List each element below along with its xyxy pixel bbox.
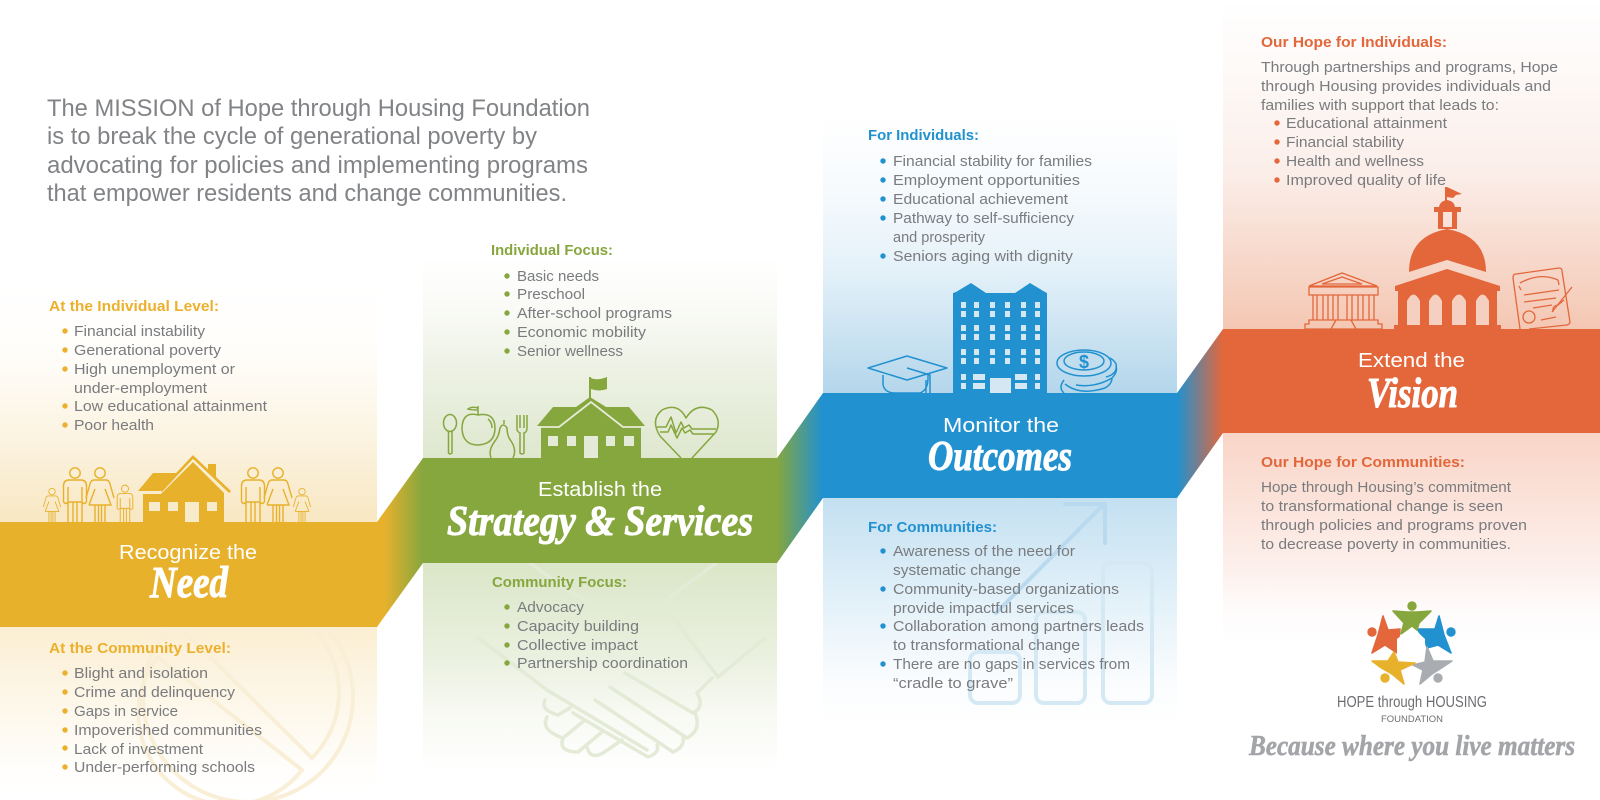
list: individual focus: After-school programs — [517, 305, 672, 322]
list: community level: Under-performing schools — [74, 759, 255, 776]
list: individual level: Financial instability — [74, 323, 205, 340]
text block: our hope for individuals: families with support that leads to: — [1261, 97, 1499, 114]
heading: recognize the need — [119, 542, 257, 607]
text block: our hope for individuals — [1261, 34, 1558, 189]
mission statement: advocating for policies and implementing programs — [47, 152, 588, 179]
heading: establish the strategy and services: Strategy & Services — [447, 499, 753, 545]
heading: monitor the outcomes: Outcomes — [928, 434, 1072, 480]
text block: our hope for communities: to transformational change is seen — [1261, 498, 1503, 515]
band: blue — [823, 393, 1177, 498]
band: yellow — [0, 522, 377, 627]
mission statement: The MISSION of Hope through Housing Foundation — [47, 95, 590, 122]
band: orange — [1223, 329, 1600, 433]
list: individual focus: Preschool — [517, 286, 585, 303]
mission statement — [47, 95, 590, 207]
arrow: yellow to green connector — [377, 458, 423, 627]
list: for communities: There are no gaps in services from — [893, 656, 1130, 673]
icon: coin stack: $ — [1079, 352, 1089, 372]
list: for individuals: For Individuals: — [868, 127, 979, 144]
list: individual focus: Basic needs — [517, 268, 599, 285]
icon: family and house — [43, 457, 311, 522]
icon: signed certificate — [1513, 268, 1572, 329]
list: community focus — [492, 574, 688, 672]
panel: establish the strategy and services — [423, 242, 777, 793]
logo: hope through housing foundation: FOUNDATION — [1381, 714, 1443, 725]
icon: school with flag — [537, 377, 645, 458]
list: for individuals: Financial stability for families — [893, 153, 1092, 170]
logo: hope through housing foundation: HOPE through HOUSING — [1337, 694, 1487, 711]
list: for individuals: Pathway to self-sufficiency — [893, 210, 1074, 227]
list: for communities: Collaboration among partners leads — [893, 618, 1144, 635]
list: individual focus: Economic mobility — [517, 324, 646, 341]
logo: hope through housing foundation — [1337, 601, 1487, 725]
heading: recognize the need: Recognize the — [119, 542, 257, 564]
list: individual level: Low educational attainment — [74, 398, 268, 415]
arrow: green to blue connector — [777, 393, 823, 563]
text block: our hope for individuals: through Housing provides individuals and — [1261, 78, 1551, 95]
list: for communities: “cradle to grave” — [893, 675, 1013, 692]
heading: establish the strategy and services — [447, 479, 753, 545]
text block: our hope for individuals: Our Hope for Individuals: — [1261, 34, 1447, 51]
watermark: prohibition symbol — [138, 592, 353, 800]
icon: coin stack — [1057, 350, 1116, 393]
text block: our hope for individuals: Educational attainment — [1286, 115, 1448, 132]
heading: extend the vision — [1358, 350, 1465, 417]
text block: our hope for individuals: Financial stability — [1286, 134, 1404, 151]
watermark: growth chart — [970, 504, 1152, 703]
heading: monitor the outcomes: Monitor the — [943, 415, 1059, 437]
text block: our hope for individuals: Through partnerships and programs, Hope — [1261, 59, 1558, 76]
list: individual focus: Individual Focus: — [491, 242, 613, 259]
list: for communities: provide impactful services — [893, 600, 1074, 617]
mission statement: that empower residents and change communities. — [47, 180, 567, 207]
list: community focus: Partnership coordination — [517, 655, 688, 672]
panel: monitor the outcomes — [823, 115, 1177, 726]
list: for communities: For Communities: — [868, 519, 997, 536]
text block: our hope for individuals: Health and wellness — [1286, 153, 1424, 170]
mission statement: is to break the cycle of generational poverty by — [47, 123, 537, 150]
text block: our hope for communities: to decrease poverty in communities. — [1261, 536, 1511, 553]
icon: food and utensils — [444, 406, 527, 458]
list: for communities: to transformational change — [893, 637, 1080, 654]
list: community focus: Community Focus: — [492, 574, 627, 591]
list: community level: Crime and delinquency — [74, 684, 235, 701]
list: for communities: Awareness of the need for — [893, 543, 1075, 560]
list: individual level: Generational poverty — [74, 342, 221, 359]
list: for communities: Community-based organizations — [893, 581, 1119, 598]
list: individual level: High unemployment or — [74, 361, 235, 378]
list: individual focus — [491, 242, 672, 360]
icon: five people around a house — [1367, 601, 1456, 684]
icon: graduation cap — [868, 356, 947, 393]
icon: courthouse temple — [1305, 273, 1382, 329]
list: for individuals: Educational achievement — [893, 191, 1069, 208]
heading: monitor the outcomes — [928, 415, 1072, 480]
panel: extend the vision — [1223, 0, 1600, 643]
band: green — [423, 458, 777, 563]
list: community focus: Collective impact — [517, 637, 639, 654]
list: for individuals — [868, 127, 1092, 265]
icon: apartment building — [953, 283, 1047, 393]
arrow: blue to orange connector — [1177, 329, 1223, 498]
list: community level: Gaps in service — [74, 703, 178, 720]
heading: establish the strategy and services: Establish the — [538, 479, 662, 501]
list: individual level: Poor health — [74, 417, 154, 434]
text block: our hope for individuals: Improved quality of life — [1286, 172, 1446, 189]
list: individual level — [49, 298, 268, 434]
heading: extend the vision: Extend the — [1358, 350, 1465, 372]
text block: our hope for communities: Hope through Housing’s commitment — [1261, 479, 1512, 496]
list: community level: Impoverished communities — [74, 722, 262, 739]
list: for individuals: Employment opportunities — [893, 172, 1080, 189]
text block: our hope for communities: Our Hope for Communities: — [1261, 454, 1465, 471]
list: community level: Blight and isolation — [74, 665, 208, 682]
panel: recognize the need — [0, 285, 377, 800]
text block: our hope for communities — [1261, 454, 1527, 553]
heading: extend the vision: Vision — [1367, 371, 1458, 417]
watermark: handshake — [478, 563, 765, 757]
text block: our hope for communities: through policies and programs proven — [1261, 517, 1527, 534]
list: community level: Lack of investment — [74, 741, 204, 758]
list: individual level: under-employment — [74, 380, 208, 397]
list: for individuals: Seniors aging with dignity — [893, 248, 1073, 265]
icon: capitol building — [1394, 187, 1501, 329]
list: community focus: Capacity building — [517, 618, 639, 635]
list: for communities — [868, 519, 1144, 692]
heading: recognize the need: Need — [149, 558, 229, 607]
list: individual focus: Senior wellness — [517, 343, 623, 360]
list: for communities: systematic change — [893, 562, 1021, 579]
list: community level: At the Community Level: — [49, 640, 231, 657]
icon: heart with pulse — [655, 407, 718, 458]
list: for individuals: and prosperity — [893, 229, 985, 246]
list: community focus: Advocacy — [517, 599, 584, 616]
list: community level — [49, 640, 262, 776]
list: individual level: At the Individual Level: — [49, 298, 219, 315]
